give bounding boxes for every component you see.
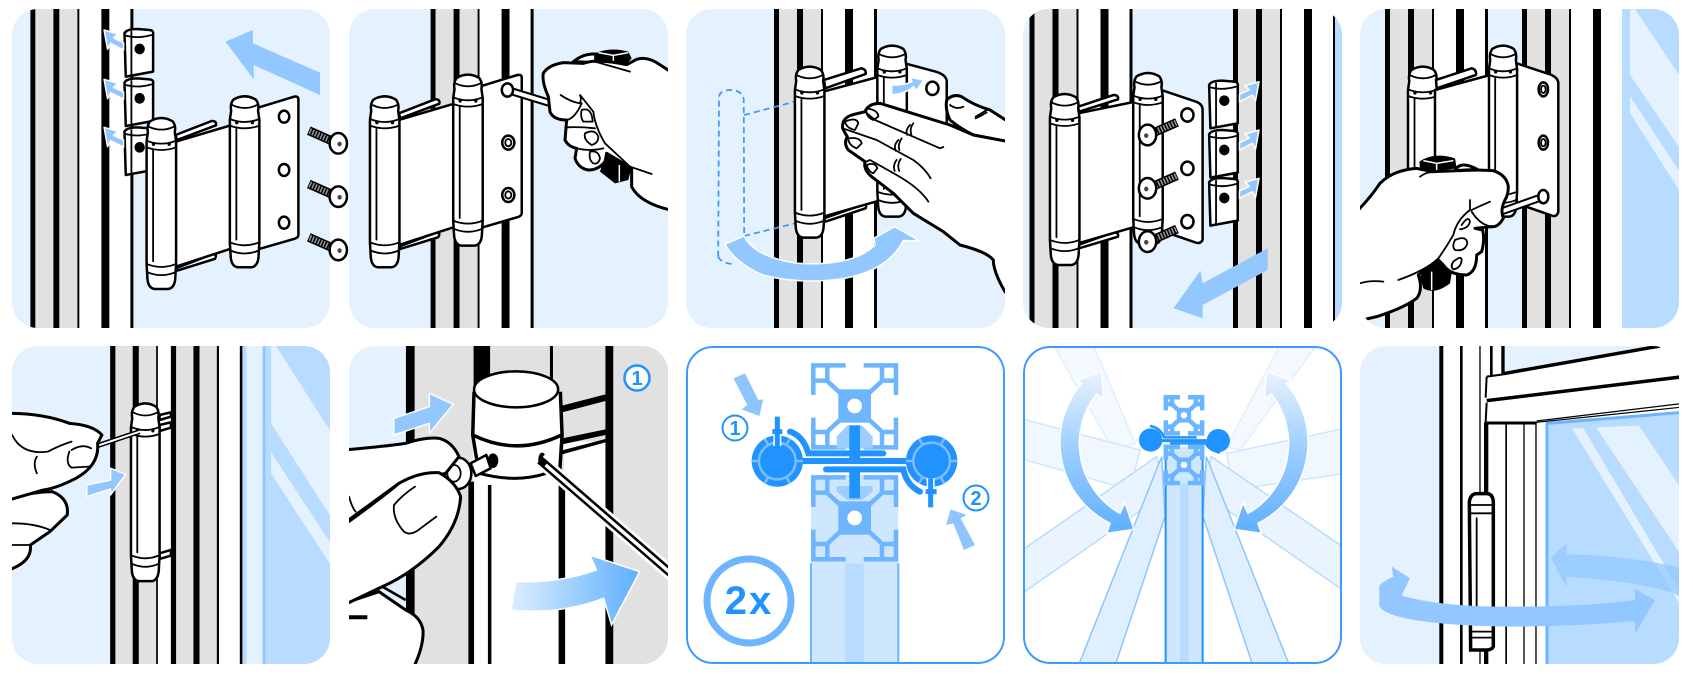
curved arrow — [725, 227, 919, 281]
big arrow — [226, 30, 320, 95]
glass pane — [1622, 9, 1679, 328]
hand — [9, 413, 102, 570]
glass pane — [1547, 412, 1683, 674]
screwdriver handle — [1419, 156, 1457, 291]
pin — [445, 453, 498, 489]
panel: step 7, close-up of pin insertion — [344, 335, 684, 674]
hinge, nuts and arrows — [104, 29, 320, 289]
panel: step 3, swing hinge against frame — [686, 0, 1008, 340]
hinge tabs — [160, 412, 171, 559]
door profile — [30, 0, 133, 340]
back swing arrow — [1551, 543, 1683, 598]
small arrows — [104, 30, 124, 147]
ghost door positions — [1020, 345, 1350, 670]
knuckle — [468, 371, 565, 674]
arrow 2 — [946, 509, 975, 550]
hinge knuckles and leaves — [1139, 426, 1230, 453]
arrow — [87, 468, 126, 497]
hinge body — [795, 46, 947, 238]
screws crossing the panel edge — [309, 131, 347, 260]
frame profile — [813, 365, 896, 447]
door leaf in section — [811, 475, 898, 670]
hinge right cylinder — [1489, 46, 1517, 217]
door profile left — [1385, 0, 1488, 340]
hinge — [1469, 494, 1493, 650]
2x badge: 2x — [725, 579, 773, 623]
curved gradient arrow — [511, 555, 640, 625]
swing arrow left — [1060, 372, 1134, 533]
adjustment pins — [772, 417, 937, 507]
panel border — [687, 347, 1004, 663]
screwdriver shaft — [502, 83, 559, 106]
step number 1 — [722, 416, 748, 440]
hex key — [540, 460, 677, 578]
door leaf — [1165, 447, 1203, 670]
hand — [344, 438, 461, 670]
door profile right — [1233, 0, 1336, 340]
small arrow — [892, 78, 922, 94]
hinge tabs — [562, 394, 605, 454]
door profile — [406, 335, 684, 674]
panel: step 4, insert screws through hinge — [1023, 0, 1343, 340]
door profile right — [1522, 0, 1625, 340]
panel: step 10, finished door swings both ways — [1360, 335, 1683, 674]
panel: step 6, insert pin in lower knuckle — [9, 335, 334, 674]
panel: step 9, door swing range in plan view — [1020, 345, 1350, 670]
panel: step 5, tighten screws — [1355, 0, 1679, 340]
knuckle right — [906, 435, 957, 487]
T-nuts — [1209, 81, 1238, 226]
front swing arrow — [1379, 567, 1655, 634]
hinge knuckle — [131, 403, 160, 581]
door profile — [774, 0, 877, 340]
swing arrow right — [1234, 372, 1308, 533]
panel: step 1, attach hinge with screws and T-nuts — [12, 0, 330, 340]
step number 2 — [964, 486, 988, 510]
hand — [843, 96, 1008, 295]
hinge — [147, 96, 298, 289]
screws — [1139, 122, 1177, 252]
hand — [1355, 165, 1508, 322]
hinge leaves — [790, 432, 920, 492]
hand — [543, 54, 673, 211]
panel border — [1024, 347, 1341, 663]
arrow 1 — [733, 373, 763, 416]
panel: step 8, adjusting two screws, plan view — [686, 346, 1005, 670]
small arrows — [1239, 82, 1259, 198]
hinge left cylinder — [1406, 65, 1438, 168]
screw heads — [502, 136, 514, 202]
knuckle left — [752, 435, 803, 487]
T-nuts — [124, 29, 153, 175]
small arrow — [394, 393, 453, 435]
hinge — [370, 75, 522, 267]
step number 2: 2 — [970, 488, 982, 510]
door profile left — [1030, 0, 1132, 340]
big arrow — [1174, 248, 1268, 318]
plate holes — [279, 111, 289, 229]
hinge leaves — [1435, 63, 1558, 216]
screwdriver handle — [595, 50, 632, 183]
glass edge — [1335, 18, 1342, 320]
door profile — [110, 335, 242, 674]
2x badge — [707, 559, 791, 643]
step number 1: 1 — [631, 368, 643, 390]
glass pane — [242, 335, 334, 674]
frame and door profiles — [1166, 397, 1202, 483]
bolts and T-nuts — [837, 425, 873, 500]
dashed ghost of hinge — [718, 90, 795, 264]
screwdriver shaft — [1500, 190, 1548, 212]
step number 1 — [624, 366, 650, 390]
door profile — [431, 0, 534, 340]
pin — [98, 432, 140, 446]
hinge — [1050, 73, 1203, 265]
frame — [1439, 335, 1683, 674]
top rail — [1486, 346, 1683, 423]
panel: step 2, tighten first screw — [349, 0, 673, 340]
step number 1: 1 — [729, 418, 741, 440]
